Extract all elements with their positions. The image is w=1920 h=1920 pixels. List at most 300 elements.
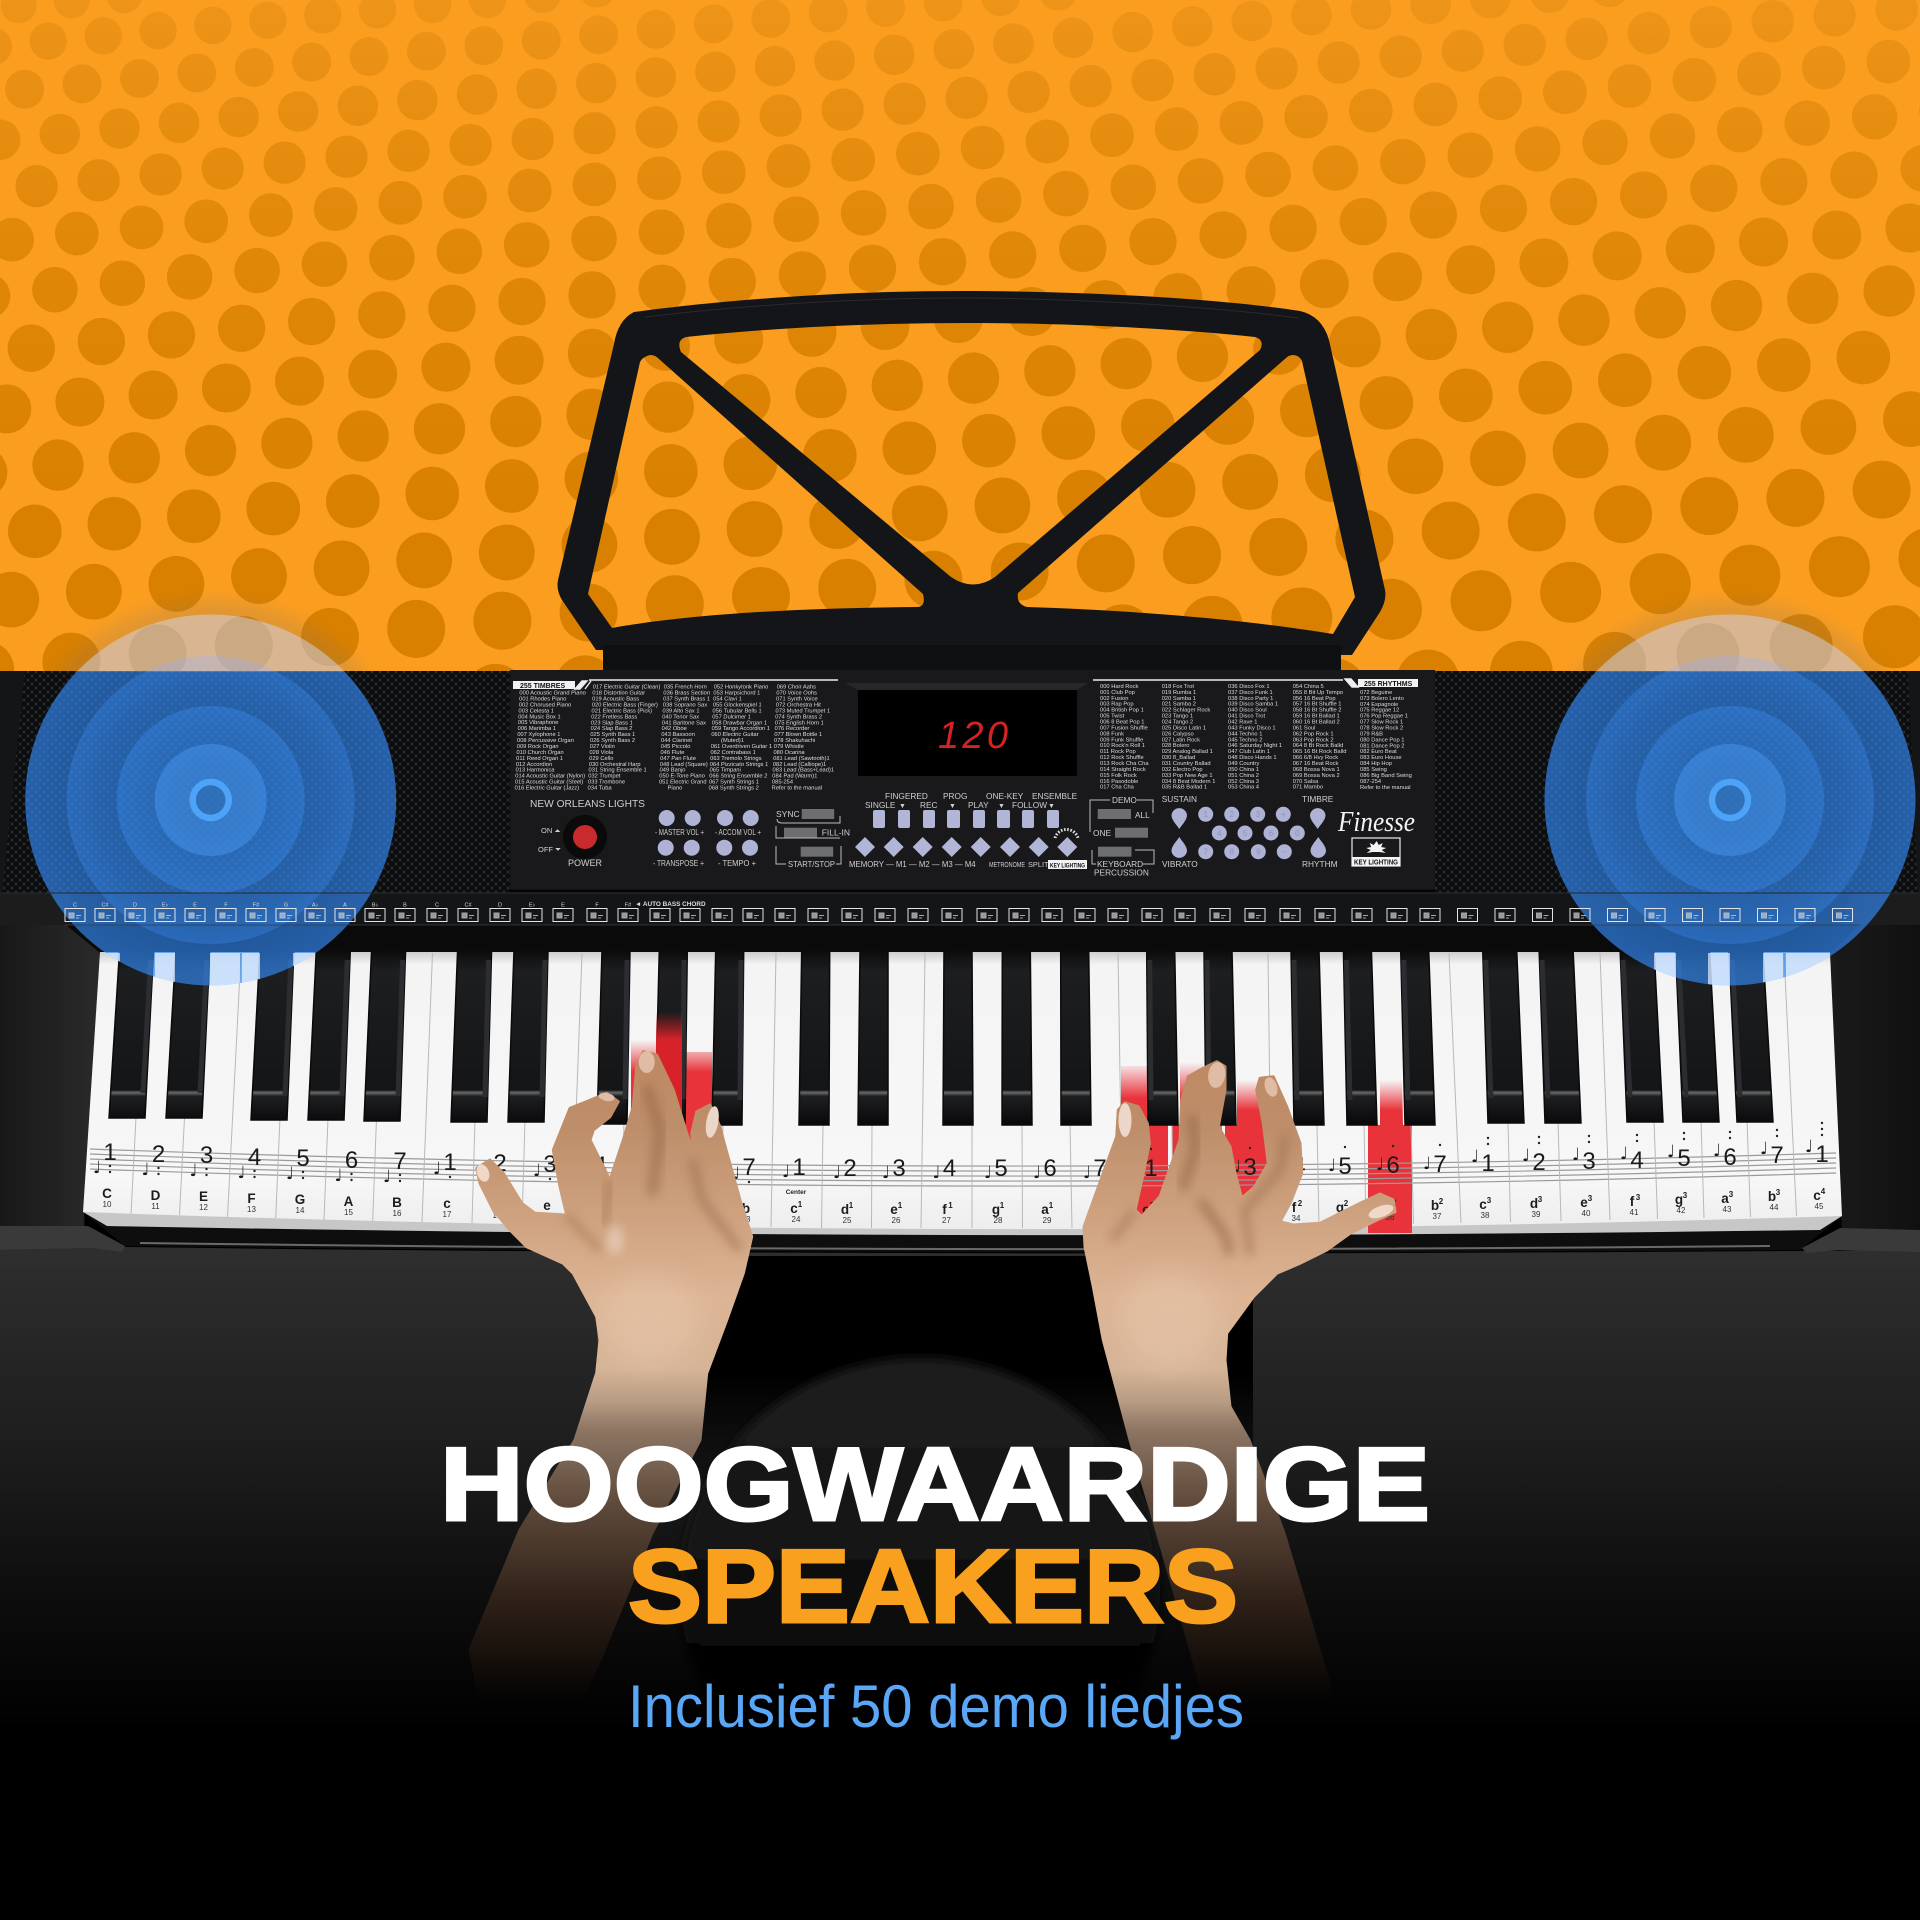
teardrop buttons xyxy=(1172,808,1326,858)
rhythm list: 077 Slow Rock 1 xyxy=(1360,720,1403,726)
rhythm list: 080 Dance Pop 1 xyxy=(1360,737,1404,743)
function labels: METRONOME xyxy=(989,860,1025,869)
timbre list: 057 Dulcimer 1 xyxy=(712,714,751,720)
right hand shading xyxy=(1112,1115,1285,1370)
function labels: ENSEMBLE xyxy=(1032,791,1078,801)
timbre list: 049 Banjo xyxy=(659,768,686,774)
rhythm list: 014 Straight Rock xyxy=(1100,767,1146,773)
brand logo: Finesse xyxy=(1337,807,1415,838)
timbre list: 044 Clarinet xyxy=(661,738,693,744)
rhythm list: 021 Samba 2 xyxy=(1162,702,1196,708)
rhythm list: 084 Hip Hop xyxy=(1360,761,1392,767)
brand logo xyxy=(1337,807,1415,866)
rhythm list: 028 Bolero xyxy=(1162,743,1190,749)
timbre list: 071 Synth Voice xyxy=(776,697,818,703)
timbre list: 081 Lead (Sawtooth)1 xyxy=(773,756,830,762)
key index numbers: 21 xyxy=(643,1214,652,1223)
key index numbers: 28 xyxy=(994,1216,1003,1225)
timbre list: 018 Distortion Guitar xyxy=(592,691,645,697)
number pad: 123+ xyxy=(1203,810,1286,819)
rhythm list: 083 Euro House xyxy=(1360,755,1402,761)
timbre list: 011 Reed Organ 1 xyxy=(516,756,563,762)
timbre list: 034 Tuba xyxy=(587,786,613,792)
timbre list: 022 Fretless Bass xyxy=(591,714,637,720)
rhythm list: 062 Pop Rock 1 xyxy=(1293,731,1334,737)
rhythm list: 059 16 Bt Ballad 1 xyxy=(1293,714,1340,720)
demo section xyxy=(1090,795,1154,878)
rhythm list: 003 Rap Pop xyxy=(1100,702,1134,708)
rhythm list: 052 China 3 xyxy=(1228,779,1259,785)
key index numbers: 27 xyxy=(942,1216,951,1225)
timbre list: 039 Alto Sax 1 xyxy=(662,708,700,714)
timbre list: 026 Synth Bass 2 xyxy=(590,738,635,744)
timbre list: 006 Marimba 1 xyxy=(517,726,556,732)
timbre header: 255 TIMBRES xyxy=(520,683,565,690)
chord icon strip xyxy=(0,893,1920,925)
rhythm list: 055 8 Bit Up Tempo xyxy=(1293,690,1343,696)
diamond buttons xyxy=(855,837,1077,857)
sustain, vibrato, timbre, rhythm labels: SUSTAIN xyxy=(1162,794,1197,804)
timbre list: 069 Choir Aahs xyxy=(776,685,816,691)
timbre list: 000 Acoustic Grand Piano xyxy=(519,691,586,697)
key index numbers: 31 xyxy=(1144,1216,1153,1225)
brand logo: KEY LIGHTING xyxy=(1354,860,1398,866)
timbre header xyxy=(513,680,838,690)
rhythm list: 086 Big Band Swing xyxy=(1360,773,1412,779)
right hand fingernails xyxy=(1118,1061,1395,1221)
rhythm list: 063 Pop Rock 2 xyxy=(1293,737,1334,743)
timbre list: 047 Pan Flute xyxy=(660,756,696,762)
key index numbers: 12 xyxy=(199,1203,208,1212)
timbre list: 021 Electric Bass (Pick) xyxy=(591,708,652,714)
rhythm list: 000 Hard Rock xyxy=(1100,684,1138,690)
chord icon strip: ◄ AUTO BASS CHORD xyxy=(635,901,706,908)
rhythm list: 048 Disco Hands 1 xyxy=(1228,755,1277,761)
rhythm list: 068 Bossa Nova 1 xyxy=(1293,767,1340,773)
rhythm list: 044 Techno 1 xyxy=(1228,731,1262,737)
chord icon strip: D xyxy=(133,902,137,908)
timbre list: 020 Electric Bass (Finger) xyxy=(592,702,658,708)
rhythm control buttons: FILL-IN xyxy=(822,828,850,838)
left speaker waves xyxy=(11,600,411,1000)
key index numbers: 19 xyxy=(543,1212,552,1221)
key index numbers: 22 xyxy=(693,1214,702,1223)
key index numbers: 39 xyxy=(1532,1210,1541,1219)
function labels: FINGERED xyxy=(885,791,928,801)
rhythm list: 019 Rumba 1 xyxy=(1162,690,1196,696)
timbre list: 001 Rhodes Piano xyxy=(519,697,567,703)
key index numbers: 25 xyxy=(843,1216,852,1225)
rhythm list: 017 Cha Cha xyxy=(1100,785,1135,791)
timbre list: 075 English Horn 1 xyxy=(775,720,824,726)
key front lips xyxy=(83,1212,1842,1235)
rhythm list: 053 China 4 xyxy=(1228,785,1260,791)
black stand post xyxy=(690,1256,1253,1526)
timbre list: 003 Celesta 1 xyxy=(518,708,554,714)
rhythm list: 032 Electro Pop xyxy=(1162,767,1203,773)
timbre list: 038 Soprano Sax xyxy=(663,702,707,708)
rhythm header xyxy=(1093,679,1418,688)
key separators xyxy=(131,953,1796,1228)
rhythm list: 004 British Pop 1 xyxy=(1100,708,1144,714)
function labels: FOLLOW xyxy=(1012,800,1047,810)
timbre list: 030 Orchestral Harp xyxy=(589,762,641,768)
function labels: SINGLE xyxy=(865,800,896,810)
lavender round buttons xyxy=(658,810,759,856)
rhythm list: 039 Disco Samba 1 xyxy=(1228,702,1278,708)
rhythm list: 002 Fusion xyxy=(1100,696,1128,702)
sustain, vibrato, timbre, rhythm labels xyxy=(1162,794,1338,869)
note name octave numbers: 1111111222222233333334 xyxy=(798,1187,1826,1210)
rhythm list: 035 R&B Ballad 1 xyxy=(1162,785,1207,791)
control panel xyxy=(510,670,1435,891)
rhythm header: 255 RHYTHMS xyxy=(1364,681,1413,688)
timbre list: 054 Clavi 1 xyxy=(713,697,742,703)
power section xyxy=(530,799,645,868)
key index numbers: 37 xyxy=(1433,1212,1442,1221)
timbre list: 067 Synth Strings 1 xyxy=(709,780,759,786)
timbre list: (Muted)1 xyxy=(721,738,744,744)
power section: ON ⏶ xyxy=(541,826,561,835)
timbre list: 062 Contrabass 1 xyxy=(710,750,756,756)
volume and tempo labels: - MASTER VOL + xyxy=(655,827,704,837)
bottom black area xyxy=(0,1730,1920,1920)
rhythm list: 073 Bolero Lento xyxy=(1360,696,1404,702)
demo section: KEYBOARD xyxy=(1097,859,1143,869)
rhythm list: 065 16 Bt Rock Balld xyxy=(1293,749,1346,755)
key index numbers: 32 xyxy=(1194,1215,1203,1224)
right speaker waves xyxy=(1530,600,1920,1000)
timbre list: 052 Honkytonk Piano xyxy=(713,685,768,691)
key index numbers: 11 xyxy=(151,1202,160,1211)
chord icon strip: F# xyxy=(625,902,632,908)
right speaker grille xyxy=(1435,671,1918,893)
volume and tempo labels: - TRANSPOSE + xyxy=(653,858,704,868)
timbre list: 025 Synth Bass 1 xyxy=(590,732,635,738)
red lit keys xyxy=(631,1040,1412,1233)
rhythm list: 066 6/8 Hvy Rock xyxy=(1293,755,1338,761)
rhythm list: 045 Techno 2 xyxy=(1228,737,1262,743)
lit black key xyxy=(656,1012,682,1124)
timbre list: 076 Recorder xyxy=(774,726,810,732)
title line 1: HOOGWAARDIGE xyxy=(440,1427,1430,1543)
key index numbers: 45 xyxy=(1815,1202,1824,1211)
rhythm list: 049 Country xyxy=(1228,761,1259,767)
function labels: ONE-KEY xyxy=(986,791,1024,801)
rhythm list: 041 Disco Trot xyxy=(1228,714,1265,720)
timbre list: Refer to the manual xyxy=(771,786,822,792)
demo section: PERCUSSION xyxy=(1094,868,1149,878)
chord icon strip: F xyxy=(595,902,599,908)
key rail below keys xyxy=(83,1212,1842,1252)
key index numbers: 20 xyxy=(593,1213,602,1222)
rhythm list: 072 Beguine xyxy=(1360,690,1392,696)
rhythm list: 071 Mambo xyxy=(1293,785,1323,791)
note names on keys: CDEFGABcdefgabcdefgabcdefgabcdefgabc xyxy=(102,1186,1821,1217)
rhythm list: 024 Tango 2 xyxy=(1162,719,1193,725)
rhythm list: 012 Rock Shuffle xyxy=(1100,755,1144,761)
timbre list: 004 Music Box 1 xyxy=(518,714,561,720)
key index numbers: 41 xyxy=(1630,1208,1639,1217)
rhythm list: 070 Salsa xyxy=(1293,779,1319,785)
chord icon strip: B♭ xyxy=(372,902,379,908)
rhythm list: 030 8_Ballad xyxy=(1162,755,1195,761)
rhythm list: 069 Bossa Nova 2 xyxy=(1293,773,1340,779)
rhythm list: 060 16 Bt Ballad 2 xyxy=(1293,719,1340,725)
octave dots xyxy=(110,1123,1822,1182)
timbre list: 014 Acoustic Guitar (Nylon) xyxy=(515,774,585,780)
volume and tempo labels xyxy=(653,827,761,868)
timbre list: 016 Electric Guitar (Jazz) xyxy=(514,785,579,791)
key index numbers: 35 xyxy=(1338,1214,1347,1223)
timbre list: 080 Ocarina xyxy=(773,750,806,756)
right hand and arm xyxy=(1084,1061,1395,1700)
chord icon strip: C xyxy=(435,902,439,908)
number pad: 789− xyxy=(1203,848,1287,856)
subtitle: Inclusief 50 demo liedjes xyxy=(628,1673,1244,1740)
timbre list: 015 Acoustic Guitar (Steel) xyxy=(515,780,583,786)
rhythm list: 026 Calypso xyxy=(1162,731,1194,737)
key index numbers: 40 xyxy=(1582,1209,1591,1218)
timbre list: 010 Church Organ xyxy=(516,750,564,756)
key index numbers: 43 xyxy=(1723,1205,1732,1214)
timbre list: 066 String Ensemble 2 xyxy=(709,774,768,780)
timbre list: 040 Tenor Sax xyxy=(662,714,699,720)
timbre list: 028 Viola xyxy=(589,750,614,756)
function labels: SPLIT xyxy=(1028,860,1049,869)
key index numbers: 30 xyxy=(1093,1216,1102,1225)
demo section: ONE xyxy=(1093,828,1111,838)
rhythm control buttons: SYNC xyxy=(776,809,800,819)
rhythm list: 046 Saturday Night 1 xyxy=(1228,743,1282,749)
timbre list: 037 Synth Brass 1 xyxy=(663,697,710,703)
timbre list: 072 Orchestra Hit xyxy=(776,702,821,708)
rhythm control buttons: START/STOP xyxy=(788,859,835,869)
function labels: PLAY xyxy=(968,800,989,810)
chord icon strip: A xyxy=(343,902,347,908)
rail highlight xyxy=(140,1243,1770,1249)
timbre list: 048 Lead (Square) xyxy=(660,762,708,768)
timbre list: 008 Percussive Organ xyxy=(517,738,574,744)
rhythm list: 076 Pop Reggae 1 xyxy=(1360,714,1408,720)
key index numbers: 14 xyxy=(296,1206,305,1215)
rhythm list: 023 Tango 1 xyxy=(1162,714,1193,720)
band under the speakers xyxy=(60,925,1860,953)
rhythm list: 061 Soul xyxy=(1293,725,1315,731)
timbre list: 013 Harmonica xyxy=(515,768,555,774)
timbre list: 002 Chorused Piano xyxy=(519,702,571,708)
timbre list: 027 Violin xyxy=(590,744,615,750)
sustain, vibrato, timbre, rhythm labels: TIMBRE xyxy=(1302,794,1334,804)
rhythm list: 022 Schlager Rock xyxy=(1162,708,1210,714)
power section: NEW ORLEANS LIGHTS xyxy=(530,799,645,810)
key index numbers: 38 xyxy=(1481,1211,1490,1220)
rhythm list: 037 Disco Funk 1 xyxy=(1228,690,1273,696)
timbre list xyxy=(514,685,838,792)
timbre list: 083 Lead (Bass+Lead)1 xyxy=(772,768,834,774)
rhythm list: 005 Twist xyxy=(1100,714,1125,720)
title line 2: SPEAKERS xyxy=(628,1529,1238,1645)
volume and tempo labels: - ACCOM VOL + xyxy=(715,827,761,837)
timbre list: 032 Trumpet xyxy=(588,774,621,780)
timbre list: 043 Bassoon xyxy=(661,732,695,738)
key index numbers: 44 xyxy=(1770,1203,1779,1212)
rhythm list: 087-254 xyxy=(1360,779,1382,785)
left hand and arm xyxy=(470,1051,752,1700)
rhythm list: 001 Club Pop xyxy=(1100,690,1135,696)
sustain, vibrato, timbre, rhythm labels: VIBRATO xyxy=(1162,859,1198,869)
key index numbers: 29 xyxy=(1043,1216,1052,1225)
timbre list: 009 Rock Organ xyxy=(517,744,559,750)
rhythm list: 008 Funk xyxy=(1100,731,1124,737)
rhythm list: 057 16 Bt Shuffle 1 xyxy=(1293,702,1342,708)
timbre list: 042 Oboe xyxy=(661,726,687,732)
timbre list: 012 Accordion xyxy=(516,762,552,768)
chord icon strip: B xyxy=(403,902,407,908)
timbre list: 079 Whistle xyxy=(774,744,804,750)
rhythm list: 056 16 Beat Pop xyxy=(1293,696,1336,702)
key index numbers: 13 xyxy=(247,1205,256,1214)
rhythm list: 036 Disco Fox 1 xyxy=(1228,684,1270,690)
timbre list: 065 Timpani xyxy=(709,768,741,774)
demo section: ALL xyxy=(1135,810,1150,820)
left side of key bed xyxy=(0,925,100,1228)
chord icon strip: F xyxy=(224,902,228,908)
function labels: ▼ xyxy=(998,803,1005,810)
timbre list: 005 Vibraphone xyxy=(518,720,558,726)
rhythm list: 033 Pop New Age 1 xyxy=(1162,773,1213,779)
key index numbers: 23 xyxy=(742,1215,751,1224)
staff lines on keys xyxy=(90,1149,1836,1186)
rhythm list: 031 Country Ballad xyxy=(1162,761,1211,767)
note glyphs on keys: ♩♩♩♩♩♩♩♩♩♩♩♩♩♩♩♩♩♩♩♩♩♩♩♩♩♩♩♩♩♩♩♩♩♩♩♩ xyxy=(93,1137,1813,1187)
rhythm list: 058 16 Bt Shuffle 2 xyxy=(1293,708,1342,714)
piano keys xyxy=(83,950,1842,1252)
timbre list: 031 String Ensemble 1 xyxy=(588,768,647,774)
side body panels xyxy=(0,893,1920,1232)
key index numbers: 18 xyxy=(493,1211,502,1220)
key lighting badge xyxy=(1048,829,1087,870)
rhythm list: 085 Swing xyxy=(1360,767,1387,773)
rhythm list: 043 Funky Disco 1 xyxy=(1228,725,1276,731)
keyboard xyxy=(0,670,1920,1252)
LED display: 120 xyxy=(938,715,1008,757)
timbre list: 019 Acoustic Bass xyxy=(592,697,639,703)
timbre list: 064 Pizzicato Strings 1 xyxy=(710,762,768,768)
key index numbers: 26 xyxy=(892,1216,901,1225)
timbre list: 033 Trombone xyxy=(588,780,625,786)
timbre list: 041 Baritone Sax xyxy=(662,720,706,726)
function labels: REC xyxy=(920,800,938,810)
number pad xyxy=(1198,807,1305,859)
rhythm list: 051 China 2 xyxy=(1228,773,1259,779)
left hand fingernails xyxy=(474,1051,721,1184)
rhythm list: 075 Reggae 12 xyxy=(1360,708,1399,714)
timbre list: 045 Piccolo xyxy=(661,744,691,750)
timbre list: 017 Electric Guitar (Clean) xyxy=(592,685,661,691)
floor below keyboard xyxy=(0,1226,1920,1920)
rhythm list: 054 China 5 xyxy=(1293,684,1324,690)
rhythm list: 067 16 Beat Rock xyxy=(1293,761,1339,767)
rhythm list: 011 Rock Pop xyxy=(1100,749,1136,755)
timbre list: 078 Shakuhachi xyxy=(774,738,815,744)
timbre list: 046 Flute xyxy=(660,750,685,756)
function labels xyxy=(849,791,1078,869)
keyboard body xyxy=(0,671,1920,953)
timbre list: 070 Voice Oohs xyxy=(776,691,817,697)
rhythm list: 009 Funk Shuffle xyxy=(1100,737,1143,743)
timbre list: 063 Tremolo Strings xyxy=(710,756,762,762)
timbre list: 058 Drawbar Organ 1 xyxy=(712,720,767,726)
power section: POWER xyxy=(568,858,602,868)
timbre list: 060 Electric Guitar xyxy=(711,732,759,738)
left speaker grille xyxy=(2,671,510,893)
rhythm list: 038 Disco Party 1 xyxy=(1228,696,1273,702)
music stand xyxy=(558,291,1385,674)
rhythm list: 013 Rock Cha Cha xyxy=(1100,761,1149,767)
function labels: PROG xyxy=(943,791,967,801)
rhythm list: 027 Latin Rock xyxy=(1162,737,1200,743)
key index numbers: 17 xyxy=(443,1210,452,1219)
chord icon strip: E♭ xyxy=(162,902,169,908)
rhythm list: 047 Club Latin 1 xyxy=(1228,749,1270,755)
key index numbers: 15 xyxy=(344,1208,353,1217)
key lighting badge: KEY LIGHTING xyxy=(1050,862,1085,870)
rhythm list: 020 Samba 1 xyxy=(1162,696,1196,702)
center label: Center xyxy=(786,1189,807,1196)
key index numbers: 42 xyxy=(1677,1206,1686,1215)
function labels: ▼ xyxy=(1048,803,1055,810)
rhythm list: 015 Folk Rock xyxy=(1100,773,1137,779)
rhythm list: 007 Fusion Shuffle xyxy=(1100,725,1148,731)
key index numbers: 34 xyxy=(1292,1214,1301,1223)
timbre list: 036 Brass Section xyxy=(663,691,710,697)
timbre list: 061 Overdriven Guitar 1 xyxy=(711,744,772,750)
timbre list: 056 Tubular Bells 1 xyxy=(712,708,762,714)
right side of key bed xyxy=(1830,925,1920,1232)
rhythm list: 064 8 Bt Rock Balld xyxy=(1293,743,1343,749)
background: halftone dot rows xyxy=(0,0,1920,814)
rhythm list xyxy=(1100,684,1412,791)
rhythm list: 078 Slow Rock 2 xyxy=(1360,725,1403,731)
volume and tempo labels: - TEMPO + xyxy=(718,858,756,868)
rhythm list: 034 8 Beat Modern 1 xyxy=(1162,779,1215,785)
key index numbers: 24 xyxy=(792,1215,801,1224)
rhythm list: 082 Euro Beat xyxy=(1360,749,1397,755)
timbre list: 023 Slap Bass 1 xyxy=(591,720,633,726)
key index numbers: 16 xyxy=(393,1209,402,1218)
rhythm list: 040 Disco Soul xyxy=(1228,708,1267,714)
numeral labels on keys: 123456712345671234567123456712345671 xyxy=(103,1139,1829,1182)
LED display xyxy=(845,683,1088,776)
rhythm list: Refer to the manual xyxy=(1360,785,1411,791)
rhythm list: 074 Espagnole xyxy=(1360,702,1398,708)
key index numbers: 33 xyxy=(1243,1215,1252,1224)
rhythm list: 029 Analog Ballad 1 xyxy=(1162,749,1213,755)
rhythm list: 050 China 1 xyxy=(1228,767,1259,773)
title xyxy=(440,1427,1430,1645)
chord icon strip: F# xyxy=(253,902,260,908)
chord icon strip: C# xyxy=(464,902,472,908)
rhythm list: 006 8 Beat Pop 1 xyxy=(1100,719,1144,725)
corner braces xyxy=(0,1226,1920,1253)
black keys xyxy=(109,950,1773,1125)
chord icon strip: D xyxy=(498,902,502,908)
rhythm control buttons xyxy=(776,809,850,869)
rhythm list: 081 Dance Pop 2 xyxy=(1360,743,1404,749)
demo section: DEMO xyxy=(1112,795,1137,805)
function labels: ▼ xyxy=(899,803,906,810)
